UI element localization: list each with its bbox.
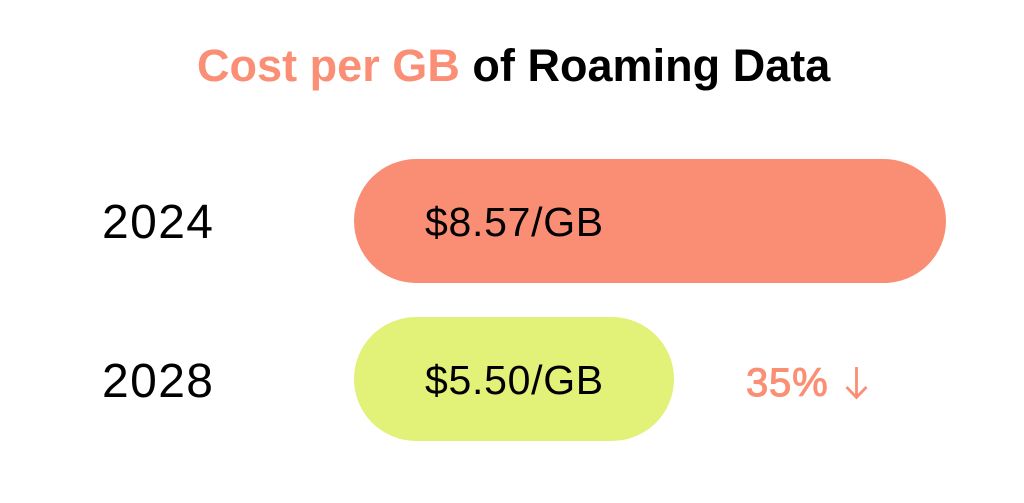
label: 2024: 2024: [102, 196, 214, 249]
callout: 35% decrease: [746, 361, 868, 405]
callout: 35% decrease: 35%: [746, 361, 828, 405]
bar: 2028: [354, 317, 674, 441]
bar value: 2024: $8.57/GB: [425, 199, 604, 245]
bar value: 2028: $5.50/GB: [425, 357, 604, 403]
bar: 2024: [354, 159, 946, 283]
title: Cost per GB of Roaming Data: [197, 40, 830, 91]
icon: down arrow: [846, 367, 868, 400]
label: 2028: 2028: [102, 355, 214, 408]
